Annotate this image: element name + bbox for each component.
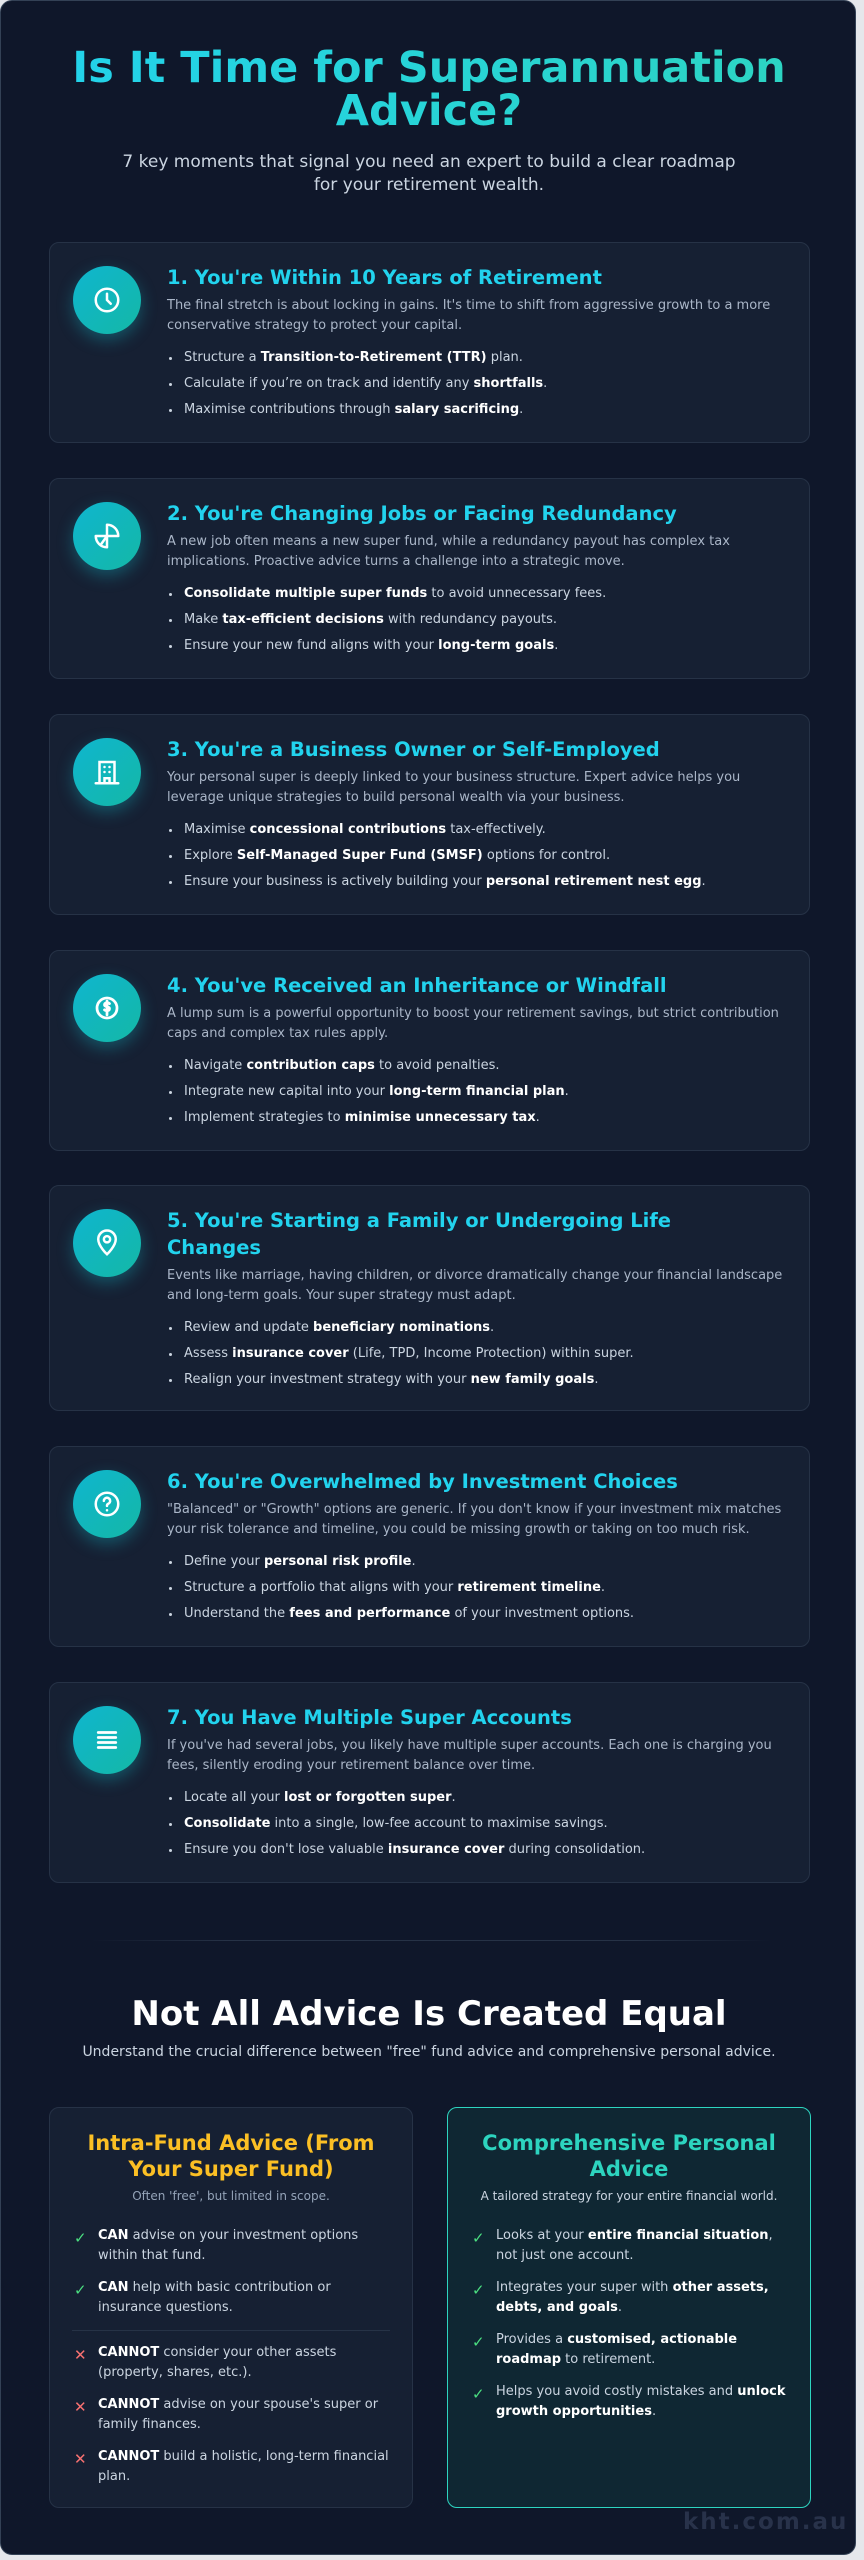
icon: pie chart	[73, 502, 141, 570]
icon: map pin	[73, 1209, 141, 1277]
panel: comprehensive personal advice: A tailored strategy for your entire financial world.	[481, 2189, 777, 2203]
subtitle: 7 key moments that signal you need an expert to build a clear roadmap	[122, 152, 736, 172]
text: card 5: Changes	[167, 1236, 261, 1259]
text: card 2: Ensure your new fund aligns with your long-term goals.	[184, 638, 558, 653]
text: card 2: A new job often means a new super fund, while a redundancy payout has complex tax implications. Proactive advice turns a challenge into a strategic move.	[167, 534, 730, 569]
text: card 4: A lump sum is a powerful opportunity to boost your retirement savings, but strict contribution caps and complex tax rules apply.	[167, 1006, 779, 1041]
text: card 5: Review and update beneficiary nominations.	[184, 1320, 494, 1335]
panel: intra-fund advice: ✓	[74, 2229, 87, 2247]
text: card 6	[167, 1470, 781, 1621]
text: card 2: Consolidate multiple super funds to avoid unnecessary fees.	[184, 586, 606, 601]
text: card 5: Realign your investment strategy with your new family goals.	[184, 1372, 598, 1387]
text: card 4: Integrate new capital into your long-term financial plan.	[184, 1084, 569, 1099]
panel: intra-fund advice: CAN advise on your investment options within that fund.	[98, 2228, 358, 2263]
panel: intra-fund advice: ✕	[74, 2346, 87, 2364]
text: card 5	[167, 1209, 782, 1387]
icon: list	[73, 1706, 141, 1774]
panel: card 7	[49, 1682, 810, 1883]
panel: intra-fund advice: CAN help with basic contribution or insurance questions.	[98, 2280, 331, 2315]
text: card 7: Locate all your lost or forgotten super.	[184, 1790, 456, 1805]
icon: clock	[73, 266, 141, 334]
text: card 1: Structure a Transition-to-Retirement (TTR) plan.	[184, 350, 523, 365]
title: Advice?	[336, 86, 522, 136]
text: card 2: Make tax-efficient decisions with redundancy payouts.	[184, 612, 557, 627]
panel: comprehensive personal advice: Helps you avoid costly mistakes and unlock growth opportunities.	[496, 2384, 786, 2419]
text: card 7	[167, 1706, 772, 1857]
text: card 4: Implement strategies to minimise unnecessary tax.	[184, 1110, 540, 1125]
panel: comprehensive personal advice: Looks at your entire financial situation, not just one account.	[496, 2228, 773, 2263]
text: card 5: 5. You're Starting a Family or Undergoing Life	[167, 1209, 671, 1232]
text: card 4: 4. You've Received an Inheritance or Windfall	[167, 974, 667, 997]
icon: building	[73, 738, 141, 806]
panel: card 6	[49, 1446, 810, 1647]
text: card 6: Structure a portfolio that aligns with your retirement timeline.	[184, 1580, 605, 1595]
text: card 6: "Balanced" or "Growth" options are generic. If you don't know if your investment mix matches your risk tolerance and timeline, you could be missing growth or taking on too much risk.	[167, 1502, 781, 1537]
text: card 2	[167, 502, 730, 653]
text: card 1: 1. You're Within 10 Years of Retirement	[167, 266, 602, 289]
text: card 3	[167, 738, 740, 889]
panel: intra-fund advice: ✓	[74, 2281, 87, 2299]
title: Is It Time for Superannuation	[72, 43, 786, 93]
panel: intra-fund advice: CANNOT advise on your spouse's super or family finances.	[98, 2397, 378, 2432]
panel: card 3	[49, 714, 810, 915]
text: card 4: Navigate contribution caps to avoid penalties.	[184, 1058, 500, 1073]
subtitle: for your retirement wealth.	[314, 175, 544, 195]
panel: comprehensive personal advice: ✓	[472, 2385, 485, 2403]
text: card 3: Ensure your business is actively building your personal retirement nest egg.	[184, 874, 706, 889]
text: card 1: The final stretch is about locking in gains. It's time to shift from aggressive growth to a more conservative strategy to protect your capital.	[167, 298, 770, 333]
text: card 5: Events like marriage, having children, or divorce dramatically change your financial landscape and long-term goals. Your super strategy must adapt.	[167, 1268, 782, 1303]
text: card 7: 7. You Have Multiple Super Accounts	[167, 1706, 572, 1729]
panel: intra-fund advice: Intra-Fund Advice (From Your Super Fund)	[87, 2131, 375, 2181]
heading: comparison: Not All Advice Is Created Equal	[131, 1994, 727, 2034]
panel: intra-fund advice: ✕	[74, 2450, 87, 2468]
panel: intra-fund advice: CANNOT build a holistic, long-term financial plan.	[98, 2449, 389, 2484]
text: card 1	[166, 266, 770, 417]
text: card 2: 2. You're Changing Jobs or Facing Redundancy	[167, 502, 677, 525]
icon: question	[73, 1470, 141, 1538]
panel: comprehensive personal advice: ✓	[472, 2333, 485, 2351]
panel: comprehensive personal advice: Integrates your super with other assets, debts, and goals.	[496, 2280, 769, 2315]
text: card 6: Define your personal risk profile.	[184, 1554, 416, 1569]
panel: comprehensive personal advice: Comprehensive Personal Advice	[482, 2131, 776, 2181]
panel: card 1	[49, 242, 810, 443]
panel: comprehensive personal advice: ✓	[472, 2229, 485, 2247]
text: card 1: Maximise contributions through salary sacrificing.	[184, 402, 523, 417]
text: card 7: If you've had several jobs, you likely have multiple super accounts. Each one is charging you fees, silently eroding your retirement balance over time.	[167, 1738, 772, 1773]
text: card 5: Assess insurance cover (Life, TPD, Income Protection) within super.	[184, 1346, 634, 1361]
text: card 3: Explore Self-Managed Super Fund (SMSF) options for control.	[184, 848, 610, 863]
icon: coin	[73, 974, 141, 1042]
watermark: kht.com.au	[683, 2509, 848, 2535]
subheading: comparison: Understand the crucial difference between "free" fund advice and comprehensive personal advice.	[82, 2044, 776, 2060]
panel: intra-fund advice	[49, 2107, 413, 2508]
title	[1, 47, 857, 133]
panel: intra-fund advice: ✕	[74, 2398, 87, 2416]
panel: card 4	[49, 950, 810, 1151]
text: card 4	[167, 974, 779, 1125]
panel: comprehensive personal advice: ✓	[472, 2281, 485, 2299]
subtitle	[122, 152, 736, 195]
text: card 1: Calculate if you’re on track and identify any shortfalls.	[184, 376, 547, 391]
text: card 7: Consolidate into a single, low-fee account to maximise savings.	[184, 1816, 608, 1831]
panel: intra-fund advice: CANNOT consider your other assets (property, shares, etc.).	[98, 2345, 336, 2380]
panel: card 5	[49, 1185, 810, 1411]
panel: comprehensive personal advice	[447, 2107, 811, 2508]
panel: comprehensive personal advice: Provides a customised, actionable roadmap to retirement.	[496, 2332, 737, 2367]
panel: intra-fund advice: Often 'free', but limited in scope.	[132, 2189, 330, 2203]
text: card 7: Ensure you don't lose valuable insurance cover during consolidation.	[184, 1842, 645, 1857]
panel: card 2	[49, 478, 810, 679]
text: card 6: 6. You're Overwhelmed by Investment Choices	[167, 1470, 678, 1493]
text: card 6: Understand the fees and performance of your investment options.	[184, 1606, 634, 1621]
text: card 3: Maximise concessional contributions tax-effectively.	[184, 822, 546, 837]
text: card 3: Your personal super is deeply linked to your business structure. Expert advice helps you leverage unique strategies to build personal wealth via your business.	[167, 770, 740, 805]
text: card 3: 3. You're a Business Owner or Self-Employed	[167, 738, 660, 761]
